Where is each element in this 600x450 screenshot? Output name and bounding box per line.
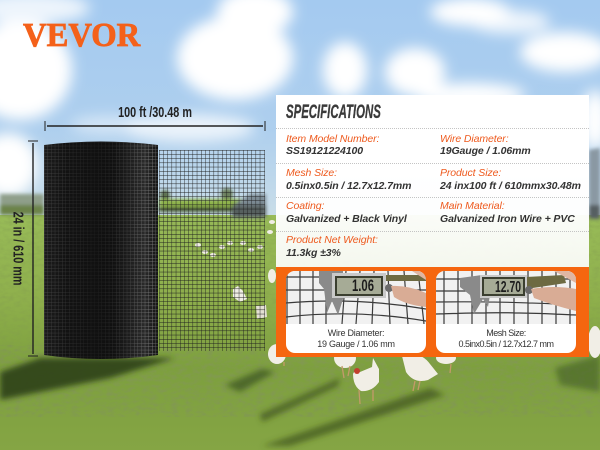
- hand: [531, 287, 576, 311]
- spec: net weight: Product Net Weight:: [286, 234, 378, 246]
- caption: [317, 328, 395, 349]
- caption: Wire Diameter:: [328, 328, 384, 338]
- width dimension: [44, 104, 266, 131]
- panel: specifications: 0.5inx0.5in / 12.7x12.7mm: [286, 180, 411, 192]
- reading: 12.70: [495, 279, 521, 296]
- grass texture: [0, 345, 600, 417]
- caption: 19 Gauge / 1.06 mm: [317, 339, 395, 349]
- card: mesh size: [436, 271, 576, 353]
- cast shadows: [0, 355, 600, 446]
- spec: wire diameter: Wire Diameter:: [440, 133, 509, 145]
- panel: specifications: 24 inx100 ft / 610mmx30.48m: [440, 180, 581, 192]
- spec: mesh size: Mesh Size:: [286, 167, 337, 179]
- spec: main material: Main Material:: [440, 200, 505, 212]
- horizon: trees, hedge and farm shed: [0, 148, 600, 219]
- panel: specifications: SS19121224100: [286, 145, 363, 157]
- panel: specifications: 11.3kg ±3%: [286, 247, 341, 259]
- height label: 24 in / 610 mm: [10, 212, 26, 285]
- width arrow: [44, 121, 266, 131]
- panel: orange measurement band: [276, 267, 589, 357]
- heading: SPECIFICATIONS: [286, 102, 381, 123]
- wire mesh roll: [44, 142, 158, 359]
- card: wire diameter: [286, 271, 426, 353]
- near chickens: [268, 344, 286, 364]
- spec: model number: Item Model Number:: [286, 133, 379, 145]
- clouds: [0, 0, 600, 197]
- hand: [391, 286, 426, 307]
- photo: caliper on mesh: [436, 271, 576, 324]
- panel: specifications: 19Gauge / 1.06mm: [440, 145, 531, 157]
- width label: 100 ft /30.48 m: [118, 104, 192, 121]
- height dimension: [10, 140, 38, 356]
- panel: specifications: Galvanized + Black Vinyl: [286, 213, 407, 225]
- reading: 1.06: [352, 276, 374, 295]
- caption: 0.5inx0.5in / 12.7x12.7 mm: [458, 339, 554, 349]
- unrolled wire mesh: [159, 150, 265, 351]
- panel: specifications: [276, 95, 589, 267]
- spec: coating: Coating:: [286, 200, 324, 212]
- spec: product size: Product Size:: [440, 167, 501, 179]
- photo: caliper on mesh: [286, 271, 426, 324]
- caption: Mesh Size:: [486, 328, 526, 338]
- VEVOR logo: VEVOR: [23, 17, 140, 54]
- height arrow: [28, 140, 38, 356]
- panel: specifications: Galvanized Iron Wire + PVC: [440, 213, 575, 225]
- caption: [458, 328, 554, 349]
